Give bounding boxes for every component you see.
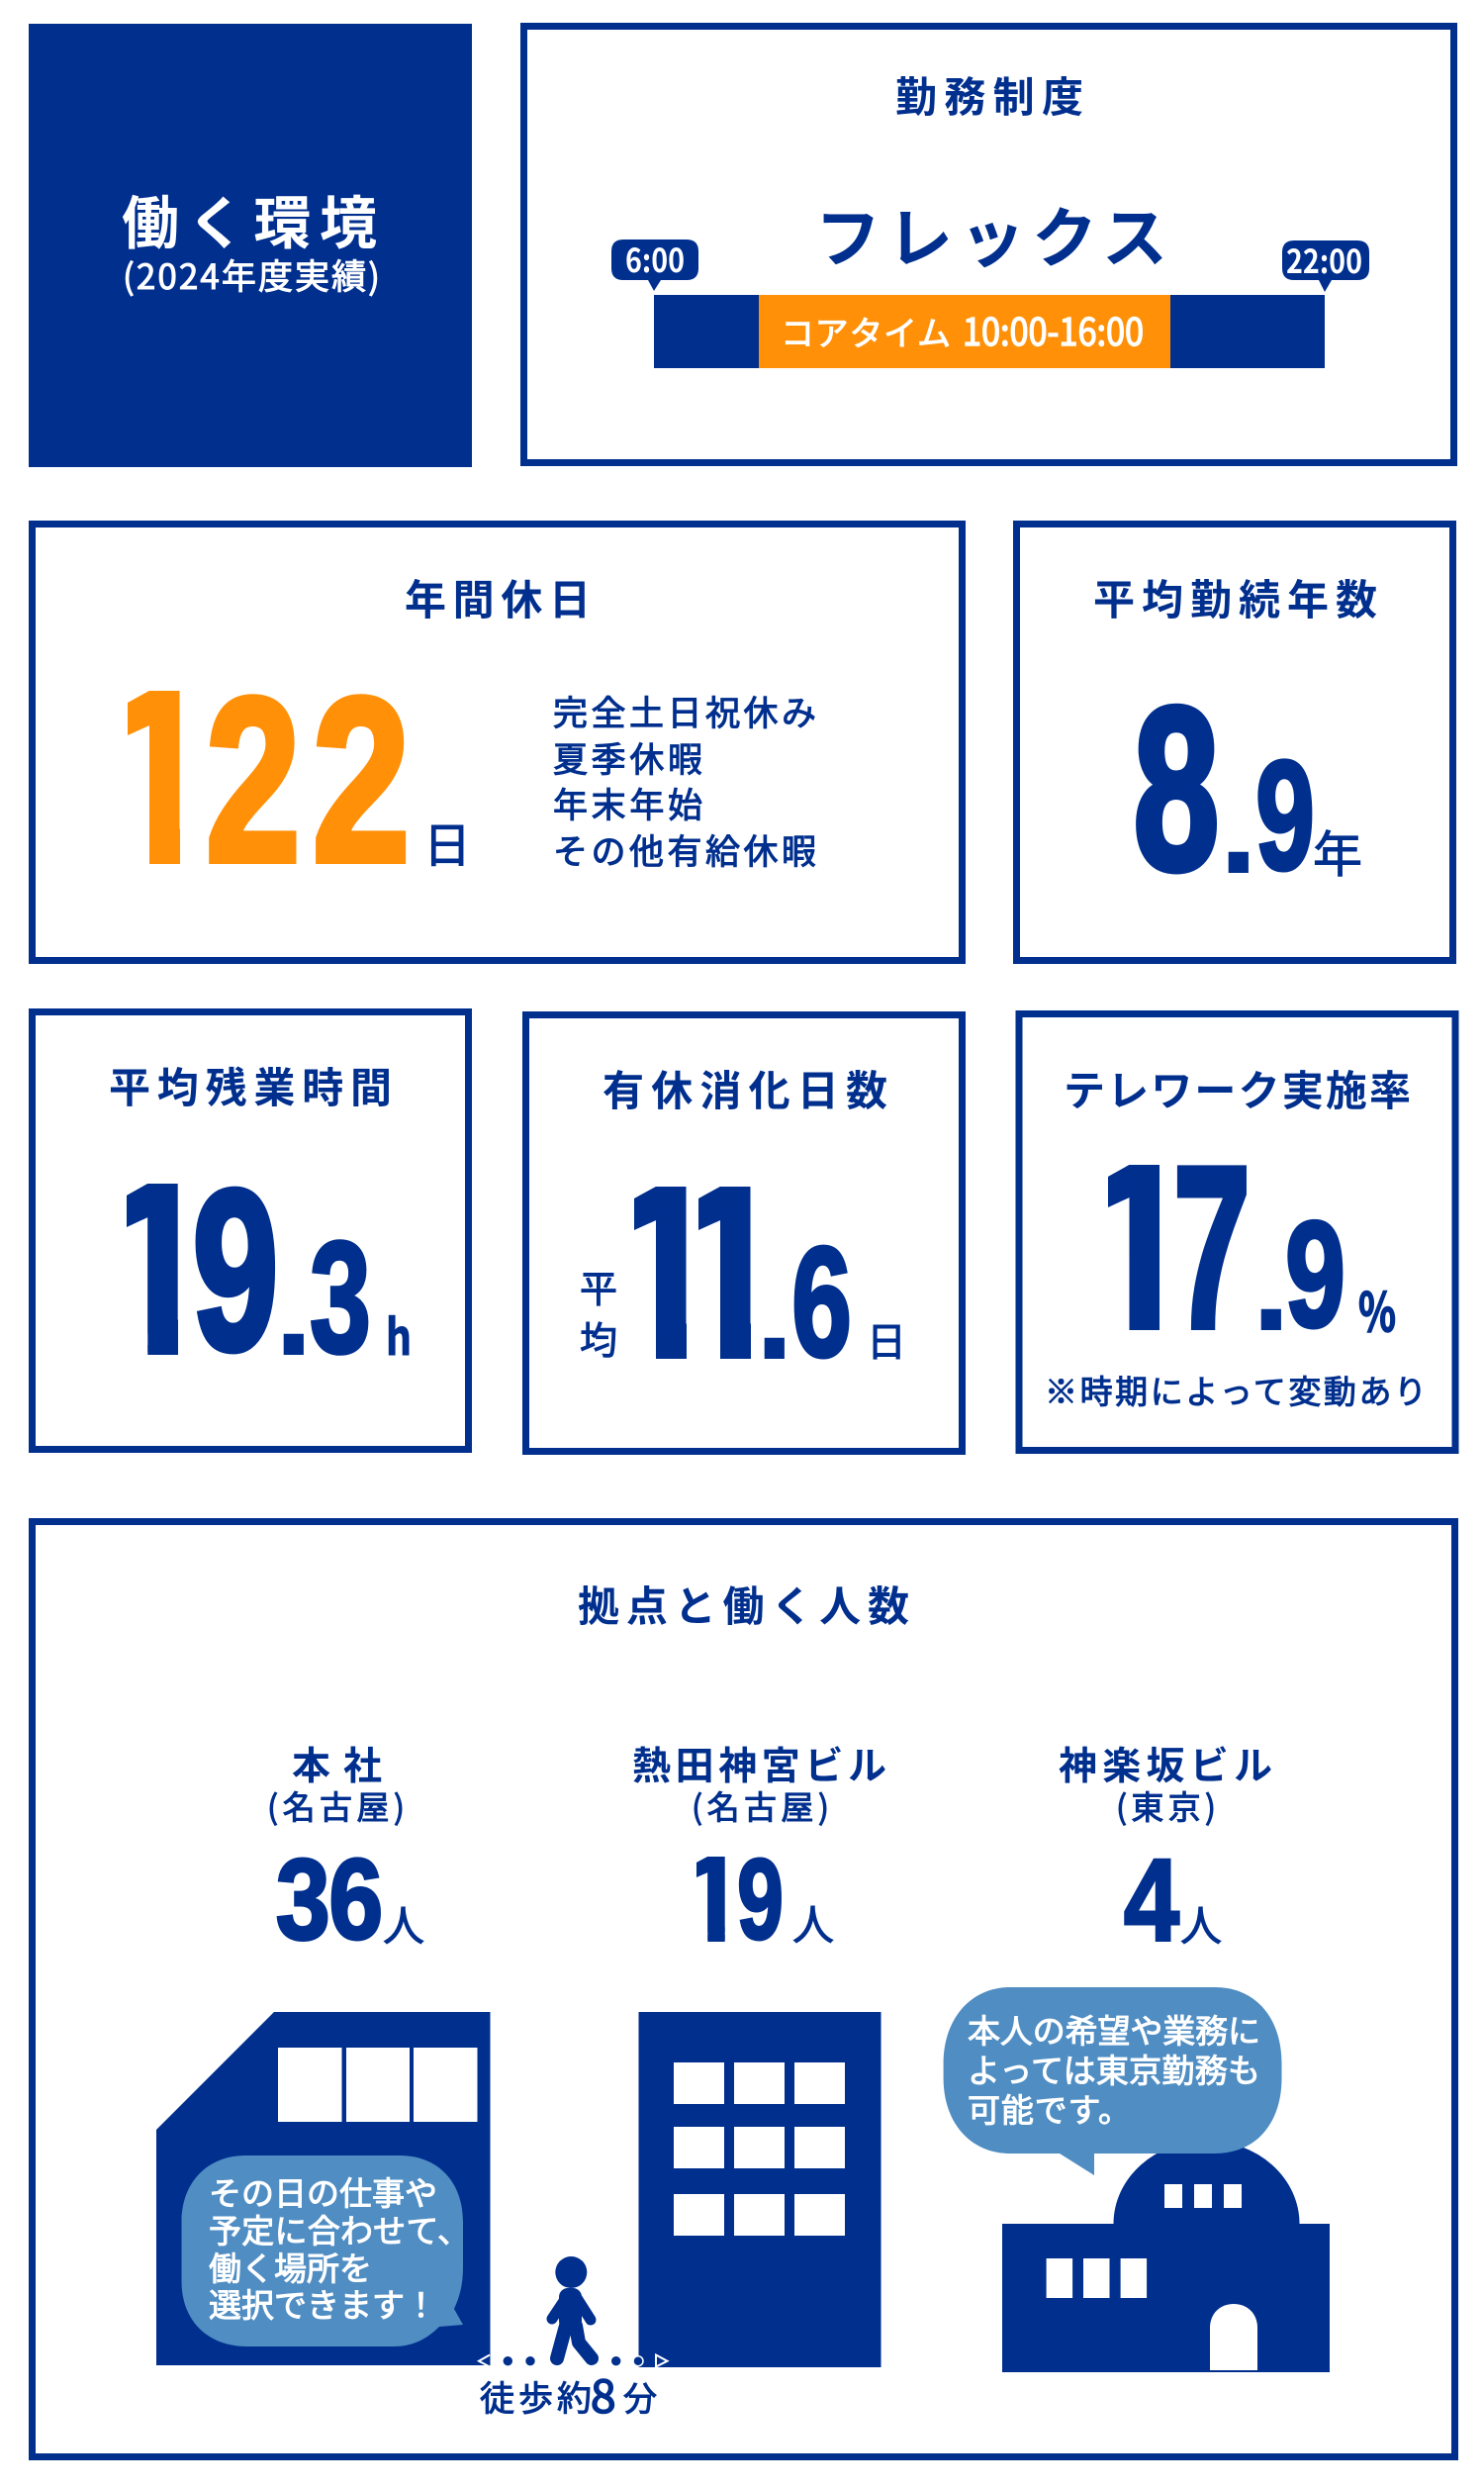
timeline bar: コアタイム [781, 307, 951, 355]
number: 8.9: 9 [1255, 729, 1315, 903]
unit: hours: h [386, 1298, 412, 1370]
number: 8.9: 8 [1134, 659, 1219, 918]
speech bubble: head office: 予定に合わせて、 [209, 2205, 470, 2252]
walking time label: 徒歩約 [480, 2371, 592, 2422]
number: 11.6 [634, 1187, 849, 1360]
speech bubble: Kagurazaka: 本人の希望や業務に [968, 2005, 1260, 2053]
number: 11.6: 6 [791, 1215, 852, 1389]
speech bubble: head office: その日の仕事や [209, 2167, 437, 2215]
office: Kagurazaka building labels: 4 [1124, 1835, 1179, 1965]
panel: heading block [29, 24, 472, 467]
heading: annual holidays: 年間休日 [405, 567, 591, 627]
number: 122: 2 [313, 649, 411, 910]
heading: paid leave: 有休消化日数 [603, 1058, 887, 1118]
walking route with person [479, 2256, 667, 2367]
speech bubble: head office: 働く場所を [209, 2243, 372, 2290]
office: head office labels: 3 [276, 1835, 330, 1963]
number: 19.3: 9 [192, 1143, 279, 1397]
number: 17.9 [1108, 1165, 1344, 1330]
panel: average tenure [1017, 525, 1452, 960]
panel: annual holidays [32, 525, 962, 960]
building: Atsuta Jingu [639, 2012, 881, 2367]
panel: paid leave [526, 1015, 962, 1451]
number: 8.9: . [1219, 746, 1258, 904]
unit: day: 日 [867, 1310, 906, 1368]
speech bubble: head office [182, 2155, 470, 2346]
panel: offices and headcount [32, 1522, 1454, 2456]
number: 17.9: 1 [1074, 1112, 1193, 1378]
panel: average overtime [32, 1011, 469, 1449]
number: 19.3: . [274, 1228, 314, 1386]
walking time label: 分 [623, 2372, 657, 2421]
unit: percent: % [1358, 1269, 1396, 1347]
end time marker: 22:00 [1286, 236, 1362, 283]
subtitle: fiscal year: (2024年度実績) [123, 249, 380, 300]
office: head office labels: (名古屋) [267, 1781, 405, 1829]
building: Kagurazaka [1002, 2141, 1330, 2372]
office: head office labels: 本社 [292, 1736, 382, 1791]
number: 17.9: 9 [1285, 1191, 1345, 1359]
heading: average tenure: 平均勤続年数 [1093, 567, 1377, 627]
office: head office labels [267, 1736, 424, 1963]
holiday list: 完全土日祝休み [553, 686, 816, 736]
number: 11.6: . [755, 1232, 794, 1389]
number: 19.3: 3 [310, 1208, 371, 1386]
number: 11.6: 1 [665, 1132, 784, 1408]
number: 17.9: 7 [1173, 1120, 1251, 1376]
unit: day: 日 [423, 807, 471, 876]
walking time label: 8 [591, 2361, 616, 2427]
speech bubble: Kagurazaka: よっては東京勤務も [968, 2045, 1260, 2092]
heading: offices: 拠点と働く人数 [578, 1574, 909, 1634]
label: average: 平 [580, 1259, 617, 1313]
note: varies by season: ※時期によって変動あり [1045, 1366, 1427, 1413]
label: average [580, 1259, 617, 1365]
office: Kagurazaka building labels: (東京) [1116, 1781, 1216, 1829]
office: head office labels: 6 [328, 1835, 383, 1963]
office: Atsuta Jingu building labels: 熱田神宮ビル [632, 1736, 886, 1791]
heading: work system: 勤務制度 [895, 64, 1083, 125]
timeline bar: 10:00-16:00 [963, 302, 1144, 356]
holiday list: 夏季休暇 [553, 732, 702, 783]
timeline bar [654, 295, 1325, 368]
speech bubble: Kagurazaka [944, 1987, 1282, 2175]
holiday list: その他有給休暇 [553, 824, 816, 875]
heading: telework rate: テレワーク実施率 [1064, 1058, 1411, 1118]
office: Atsuta Jingu building labels [633, 1746, 885, 1944]
number: 122 [128, 691, 406, 864]
office: Atsuta Jingu building labels: 9 [737, 1835, 784, 1963]
speech bubble: Kagurazaka: 可能です。 [968, 2084, 1131, 2132]
office: Kagurazaka building labels [1059, 1736, 1272, 1965]
office: Kagurazaka building labels: 人 [1180, 1893, 1222, 1954]
number: 19.3 [127, 1184, 368, 1356]
panel: telework rate [1019, 1013, 1455, 1451]
label: average: 均 [580, 1310, 617, 1365]
office: Kagurazaka building labels: 神楽坂ビル [1059, 1736, 1272, 1791]
title: 働く環境 [122, 177, 377, 260]
number: 19.3: 1 [93, 1128, 212, 1404]
heading: average overtime: 平均残業時間 [109, 1055, 392, 1115]
number: 122: 2 [206, 649, 301, 910]
start time marker [611, 235, 698, 291]
office: Atsuta Jingu building labels: (名古屋) [692, 1781, 829, 1829]
walking time label [480, 2361, 657, 2427]
building: head office [156, 2012, 491, 2365]
number: 122: 1 [95, 637, 214, 913]
holiday list [553, 686, 816, 875]
start time marker: 6:00 [625, 235, 685, 282]
panel: work system [524, 26, 1454, 463]
office: Atsuta Jingu building labels: 1 [675, 1829, 744, 1966]
flex label: フレックス [815, 186, 1167, 281]
office: Atsuta Jingu building labels: 人 [792, 1892, 834, 1953]
speech bubble: head office: 選択できます！ [209, 2279, 437, 2327]
number: 17.9: . [1252, 1203, 1291, 1361]
holiday list: 年末年始 [553, 778, 702, 828]
number: 11.6: 1 [602, 1132, 720, 1408]
office: head office labels: 人 [383, 1893, 424, 1954]
unit: year: 年 [1313, 815, 1362, 887]
